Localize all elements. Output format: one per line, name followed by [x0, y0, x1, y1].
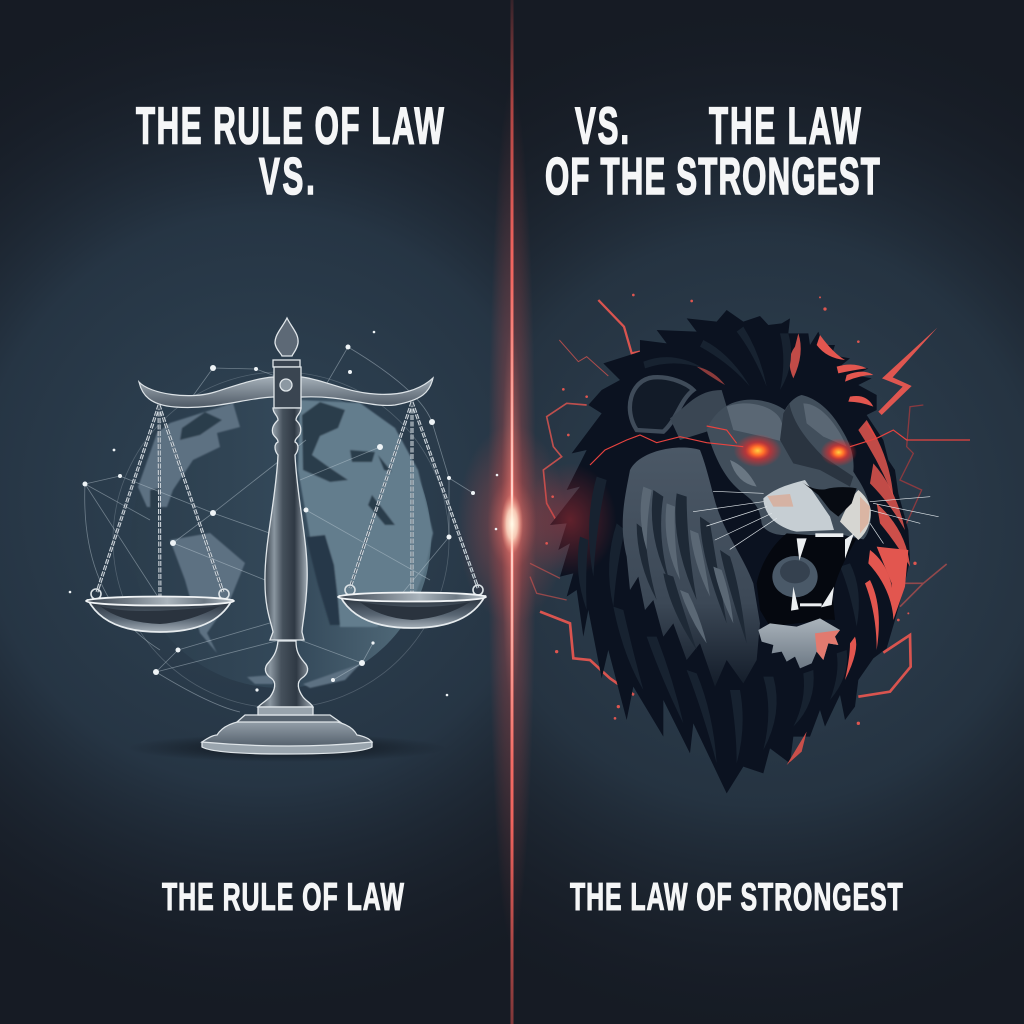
lightning bolts [530, 300, 947, 697]
central divider: red light line [457, 0, 567, 1024]
red rim-lit mane [697, 333, 910, 680]
left pan [86, 596, 234, 632]
title: left: VS. [259, 148, 315, 206]
base shadow [127, 734, 447, 762]
column and finial [258, 318, 313, 707]
base [202, 707, 372, 754]
red sparks [545, 294, 917, 725]
icon: roaring black lion with red lightning [523, 294, 970, 793]
title: right: VS. [575, 97, 629, 156]
glowing eyes [734, 434, 857, 467]
mane fur strands [637, 487, 747, 650]
title: left: THE RULE OF LAW [136, 97, 444, 156]
dark mane tufts [578, 327, 859, 763]
right pan [338, 592, 486, 628]
network lines and nodes [85, 347, 473, 712]
muzzle [763, 480, 834, 532]
red energy line across the eyes [590, 423, 970, 465]
title: right [545, 97, 880, 206]
ear [630, 377, 693, 432]
inner gray mane [623, 447, 760, 687]
beam [139, 377, 433, 407]
nose [802, 482, 857, 517]
left red glow on mane [523, 463, 617, 577]
globe with continents [131, 388, 433, 688]
title: right: THE LAW [709, 97, 861, 156]
icon: scales of justice over networked globe [69, 318, 498, 762]
mane silhouette [550, 310, 910, 793]
whiskers [693, 491, 938, 549]
bottom label: right: THE LAW OF STRONGEST [570, 874, 903, 918]
chains [97, 402, 478, 600]
title: left [136, 97, 444, 206]
chin fur [758, 618, 840, 668]
face [707, 395, 871, 539]
bottom label: left: THE RULE OF LAW [162, 874, 404, 918]
title: right: OF THE STRONGEST [545, 148, 880, 206]
mouth and teeth [757, 533, 857, 627]
